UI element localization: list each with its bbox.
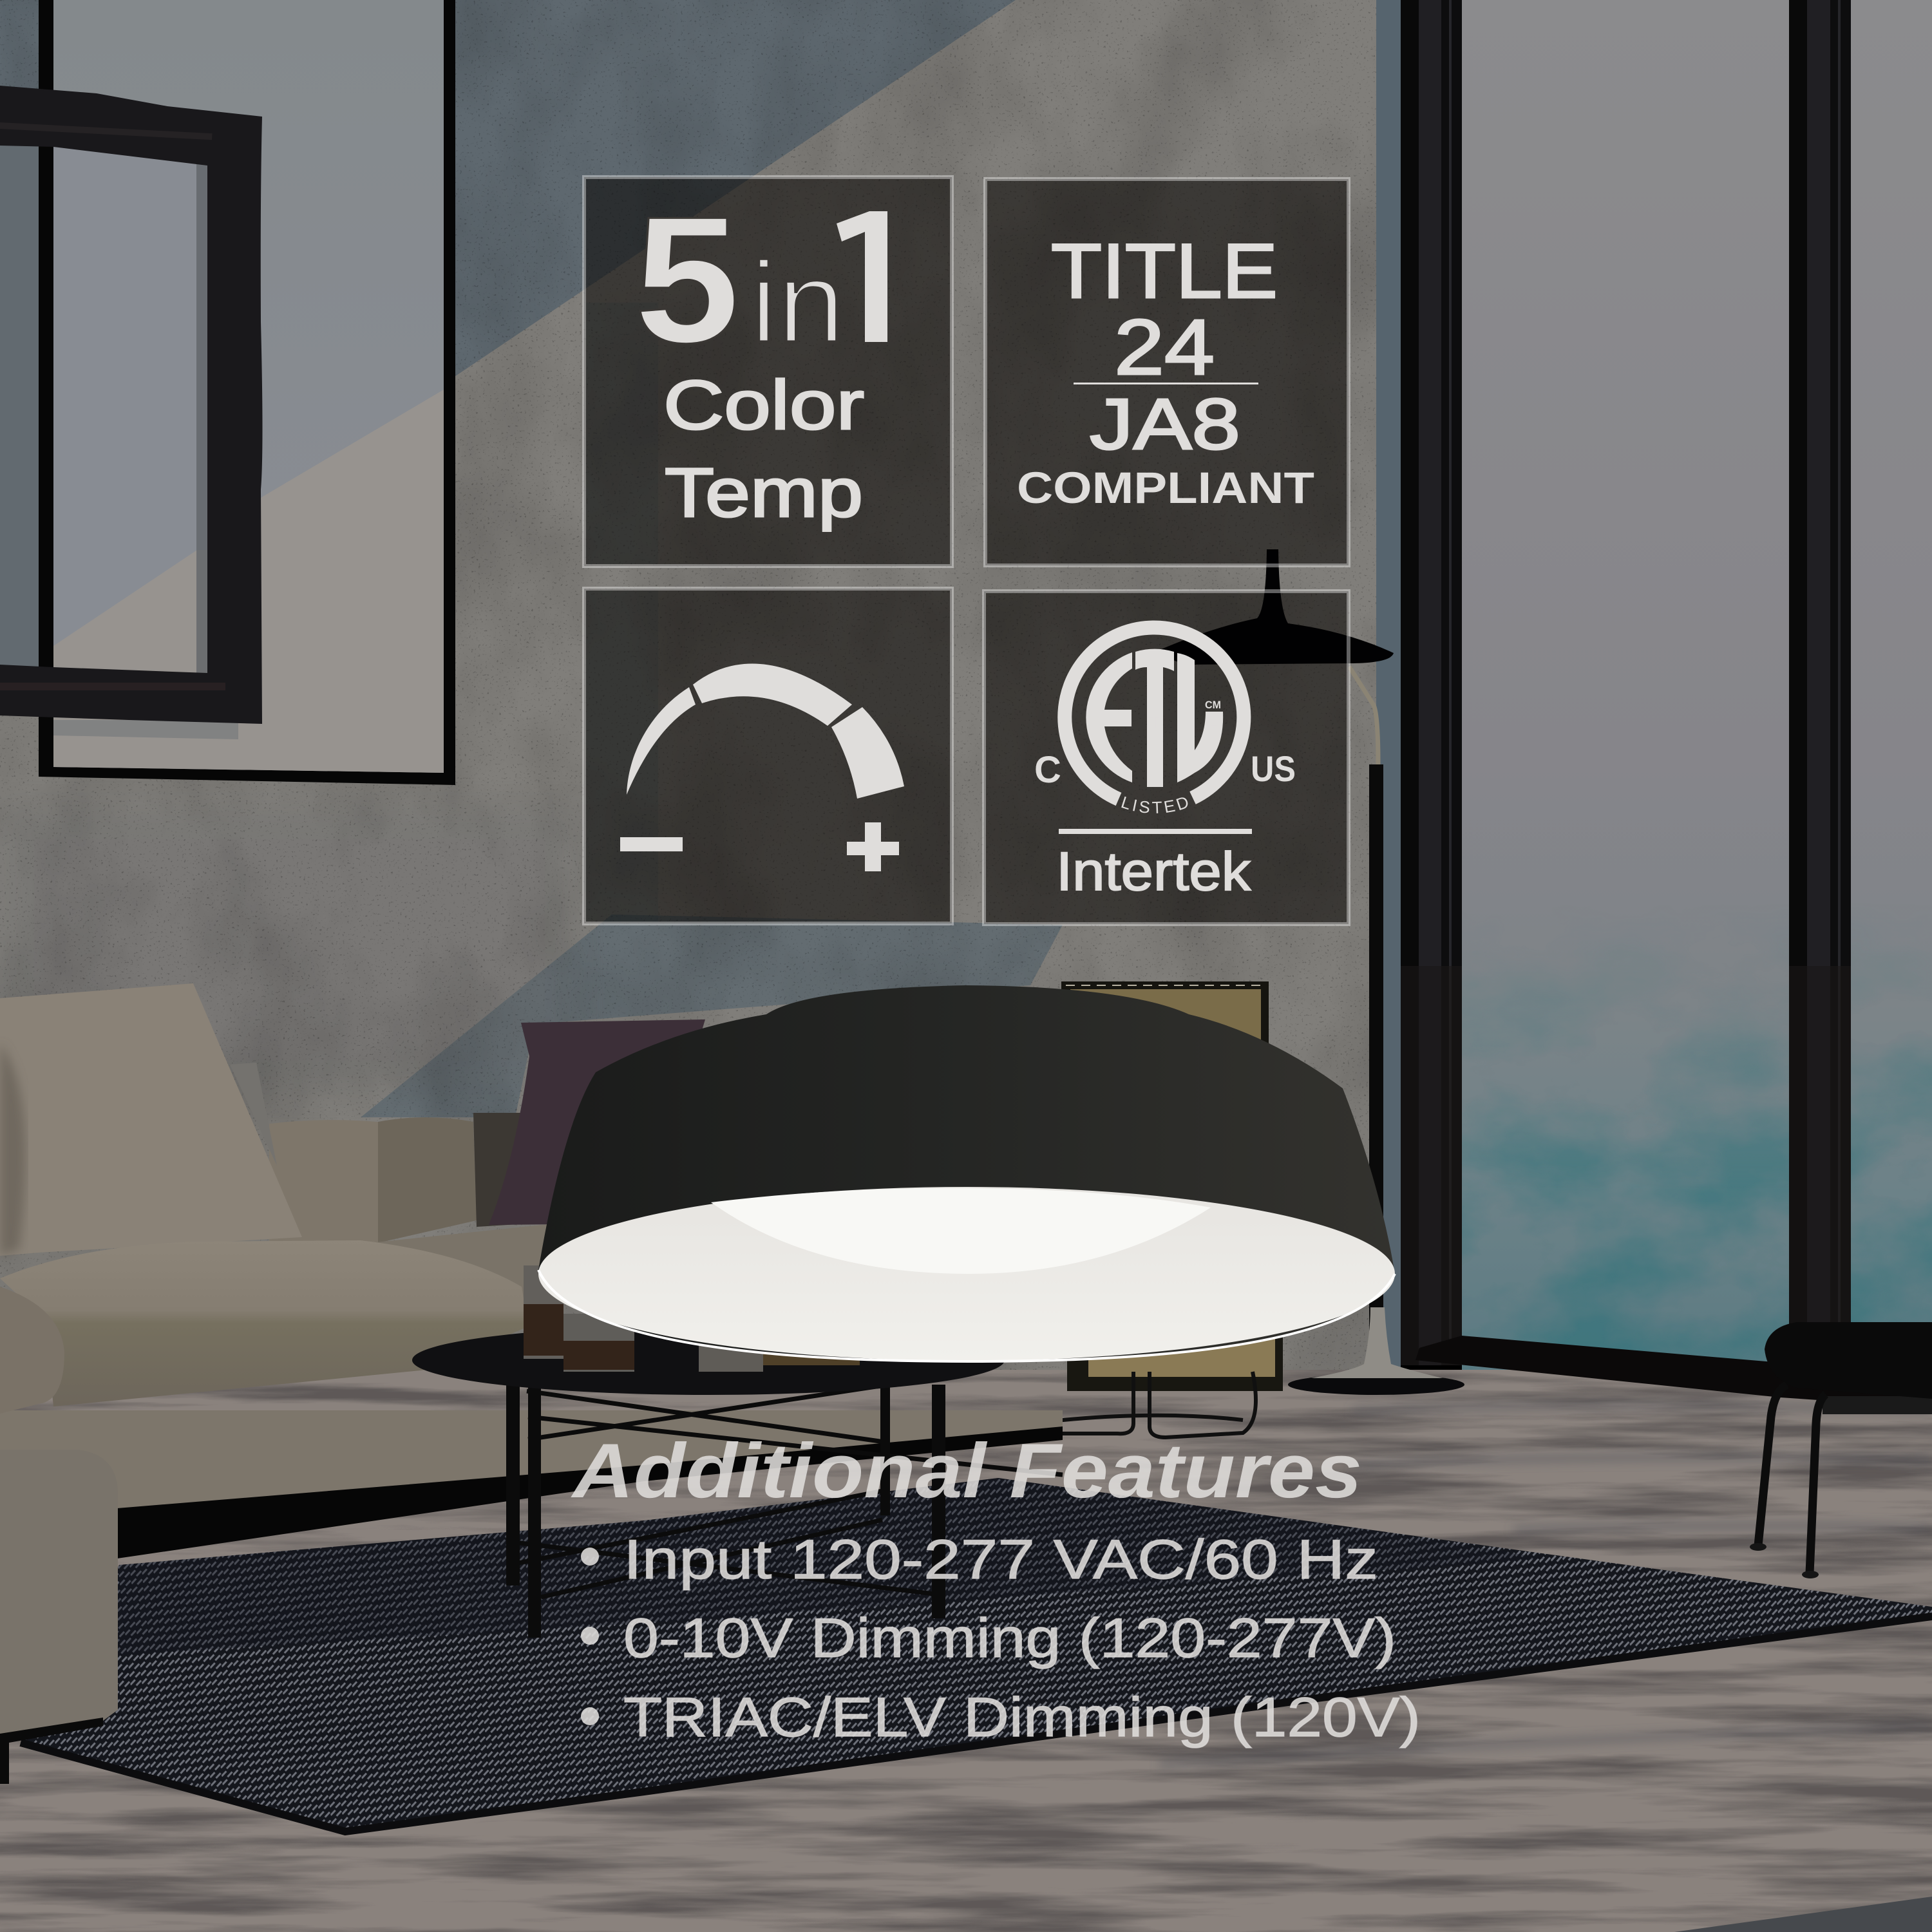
- product: black ceiling light: [538, 985, 1395, 1361]
- stool: [1750, 1322, 1932, 1578]
- heading: Additional Features: [571, 1428, 1362, 1514]
- table top: [412, 1325, 1005, 1395]
- big 1: 1: [835, 171, 909, 381]
- pillow shadow: [0, 1043, 26, 1256]
- sofa black plinth: [117, 1426, 1063, 1558]
- window frame mullions: [1401, 0, 1851, 1397]
- icon: ETL mark: T: [1149, 712, 1160, 732]
- window glass with foggy forest: [1462, 0, 1932, 1378]
- additional features text block: [571, 1428, 1421, 1748]
- glowing diffuser: [711, 1188, 1211, 1274]
- large pillow: [0, 983, 302, 1256]
- 24: 24: [1114, 303, 1215, 391]
- floor lamp: [1160, 549, 1464, 1395]
- lamp white lip: [538, 1270, 1395, 1361]
- bullet: TRIAC: TRIAC/ELV Dimming (120V): [623, 1687, 1421, 1748]
- canvas leaning on wall: [1056, 981, 1283, 1437]
- panel: ETL listed Intertek: [982, 589, 1350, 926]
- ottoman foot: [0, 1718, 103, 1784]
- coffee table: [412, 1265, 1063, 1638]
- right seat: [370, 1224, 580, 1352]
- concrete wall: [0, 0, 1401, 1378]
- concrete floor: [0, 1370, 1932, 1932]
- rule: [1059, 829, 1252, 834]
- JA8: JA8: [1090, 384, 1240, 464]
- panel: 5 in 1 color temp: [584, 171, 952, 566]
- Temp: Temp: [665, 453, 863, 531]
- decanters: [524, 1265, 860, 1372]
- divider rule: [1074, 383, 1258, 384]
- COMPLIANT: COMPLIANT: [1017, 463, 1314, 513]
- icon: ETL mark: LISTED: [1121, 796, 1188, 813]
- icon: minus: [620, 837, 683, 851]
- panel: dimming gauge: [584, 589, 952, 923]
- icon: ETL mark: [1057, 621, 1251, 813]
- sofa: [0, 983, 1063, 1784]
- icon: ETL mark: CM: [1205, 699, 1221, 711]
- back cushions: [269, 1120, 378, 1243]
- panel: title 24 JA8 compliant: [985, 179, 1349, 565]
- icon: plus: [847, 822, 899, 871]
- rug: [21, 1478, 1932, 1832]
- window sill: [1416, 1336, 1932, 1408]
- c mark: C: [1034, 749, 1061, 791]
- lamp interior rim: [538, 1187, 1395, 1361]
- sofa base: [0, 1410, 1063, 1508]
- wooden picture frame: [0, 86, 262, 739]
- big 5: 5: [634, 180, 740, 381]
- bullet: 0-10V: 0-10V Dimming (120-277V): [623, 1607, 1396, 1669]
- left seat cushion: [0, 1287, 64, 1414]
- ottoman: [0, 1450, 118, 1736]
- us mark: US: [1251, 748, 1296, 789]
- back cushion second: [378, 1117, 477, 1243]
- big 1: [837, 211, 887, 342]
- icon: ETL mark: E: [1106, 707, 1119, 728]
- in: in: [750, 238, 845, 366]
- purple pillow: [489, 1019, 705, 1225]
- icon: ETL mark: L: [1207, 712, 1218, 732]
- icon: dimmer arc: [627, 663, 904, 799]
- back cushion dark arm: [473, 1113, 528, 1227]
- bullet: input: Input 120-277 VAC/60 Hz: [623, 1529, 1378, 1591]
- main seat cushion: [0, 1240, 528, 1406]
- TITLE: TITLE: [1051, 228, 1278, 314]
- Intertek: Intertek: [1056, 841, 1251, 902]
- Color: Color: [663, 366, 864, 444]
- poster frame on wall: [39, 0, 455, 785]
- small grey pillow: [230, 1063, 277, 1166]
- lamp shade: [538, 985, 1395, 1361]
